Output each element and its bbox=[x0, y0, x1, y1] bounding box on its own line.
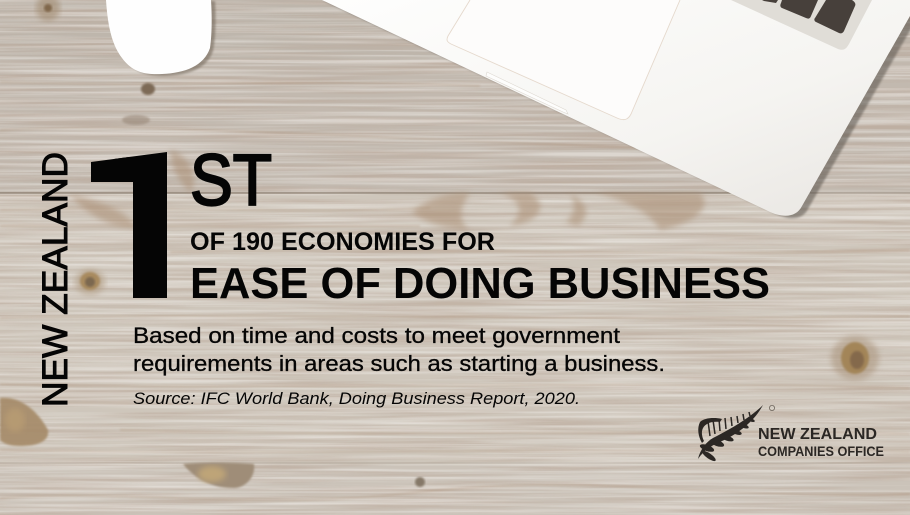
source: Source: IFC World Bank, Doing Business Report, 2020. bbox=[133, 389, 580, 408]
subheading: OF 190 ECONOMIES FOR bbox=[190, 228, 495, 256]
mouse bbox=[106, 0, 216, 76]
laptop bbox=[322, 0, 910, 218]
description: Based on time and costs to meet government bbox=[133, 323, 620, 348]
icon: silver fern bbox=[698, 405, 763, 463]
vertical label: New Zealand: NEW ZEALAND bbox=[35, 152, 75, 407]
logo: New Zealand Companies Office: COMPANIES OFFICE bbox=[758, 444, 884, 459]
registered mark bbox=[769, 405, 775, 411]
keys bbox=[762, 0, 778, 3]
trackpad bbox=[447, 0, 680, 120]
ordinal suffix: ST bbox=[190, 141, 272, 221]
wood stains bbox=[70, 150, 704, 230]
logo: New Zealand Companies Office bbox=[698, 405, 884, 463]
keyboard well bbox=[731, 0, 872, 50]
trackpad latch bbox=[486, 72, 568, 114]
description bbox=[133, 323, 665, 376]
number 1: 1 bbox=[68, 113, 182, 342]
logo text: NEW ZEALAND bbox=[758, 426, 877, 443]
plank joints bbox=[0, 193, 910, 463]
description: requirements in areas such as starting a business. bbox=[133, 351, 665, 376]
main heading: EASE OF DOING BUSINESS bbox=[190, 259, 770, 308]
